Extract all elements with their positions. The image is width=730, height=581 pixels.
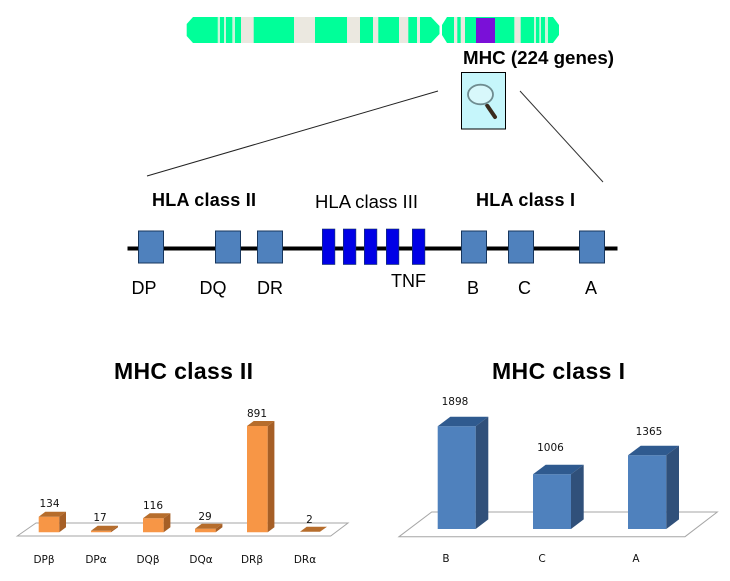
axis labels bbox=[442, 553, 640, 565]
bar DQa bbox=[195, 524, 222, 532]
axis labels bbox=[33, 554, 316, 566]
value labels: 2 bbox=[306, 514, 313, 526]
gene map bbox=[128, 229, 618, 264]
bar DRb bbox=[247, 421, 274, 532]
axis labels: C bbox=[538, 553, 546, 565]
value labels bbox=[39, 408, 313, 526]
axis labels: A bbox=[632, 553, 640, 565]
bar chart: MHC class I bbox=[399, 396, 717, 565]
axis labels: DPα bbox=[85, 554, 107, 566]
value labels bbox=[442, 396, 662, 454]
bar C bbox=[533, 465, 584, 529]
gene labels: DQ bbox=[200, 278, 226, 298]
chromosome ideogram bbox=[187, 17, 559, 43]
value labels: 1365 bbox=[636, 426, 662, 438]
value labels: 116 bbox=[143, 500, 163, 512]
bar B bbox=[438, 417, 488, 529]
gene labels: DP bbox=[132, 278, 157, 298]
icon: magnifying glass bbox=[462, 72, 506, 129]
gene labels: A bbox=[585, 278, 597, 298]
value labels: 1006 bbox=[537, 442, 564, 454]
axis labels: DQβ bbox=[136, 554, 160, 566]
zoom line left bbox=[147, 91, 438, 176]
gene labels bbox=[132, 271, 597, 298]
heading: HLA class II: HLA class II bbox=[152, 190, 256, 210]
value labels: 1898 bbox=[442, 396, 468, 408]
title: MHC class II: MHC class II bbox=[114, 358, 253, 384]
heading: HLA class III: HLA class III bbox=[315, 191, 418, 212]
axis labels: DPβ bbox=[33, 554, 55, 566]
axis labels: DRα bbox=[294, 554, 316, 566]
gene labels: DR bbox=[257, 278, 283, 298]
axis labels: DRβ bbox=[241, 554, 263, 566]
gene labels: TNF bbox=[391, 271, 426, 291]
bar DRa bbox=[300, 527, 327, 532]
gene labels: C bbox=[518, 278, 531, 298]
axis labels: DQα bbox=[189, 554, 213, 566]
MHC band bbox=[476, 18, 495, 43]
value labels: 891 bbox=[247, 408, 267, 420]
value labels: 29 bbox=[198, 511, 212, 523]
bar DPa bbox=[91, 526, 118, 532]
title: MHC class I: MHC class I bbox=[492, 358, 625, 384]
heading: HLA class I: HLA class I bbox=[476, 190, 575, 210]
gene labels: B bbox=[467, 278, 479, 298]
value labels: 134 bbox=[39, 498, 60, 510]
MHC heading: MHC (224 genes) bbox=[463, 47, 614, 68]
value labels: 17 bbox=[93, 512, 107, 524]
bar A bbox=[628, 446, 679, 529]
zoom line right bbox=[520, 91, 603, 182]
bar chart: MHC class II bbox=[17, 408, 348, 566]
bar DPb bbox=[39, 512, 66, 532]
bar DQb bbox=[143, 513, 170, 532]
axis labels: B bbox=[442, 553, 450, 565]
